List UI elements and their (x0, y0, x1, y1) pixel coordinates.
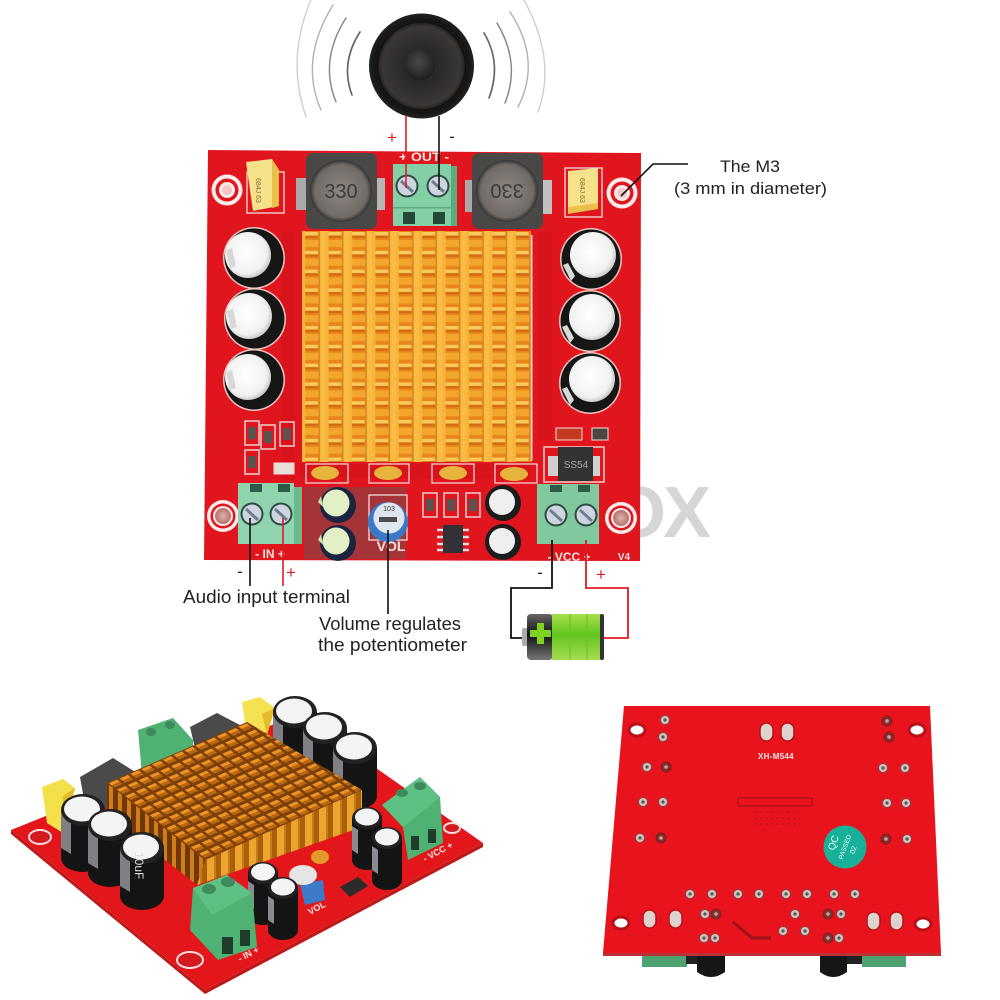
inductors (296, 153, 552, 229)
wire: volume leader (387, 530, 389, 614)
green terminal front (190, 875, 257, 960)
wires: audio input (250, 518, 283, 586)
small capacitors right (352, 807, 402, 890)
ceramic capacitors (306, 464, 537, 483)
power polarity marks: - (537, 563, 543, 582)
yellow capacitors (42, 697, 275, 833)
rear view of board (603, 706, 941, 977)
potentiometer (368, 495, 408, 542)
yellow film capacitors (246, 159, 602, 217)
ceramic capacitor (311, 850, 329, 864)
board silkscreen labels (255, 538, 631, 564)
label: volume potentiometer: Volume regulates (319, 614, 461, 634)
protruding parts (642, 950, 906, 977)
large solder pads (643, 723, 903, 930)
speaker polarity marks: + (387, 128, 397, 147)
SS54 diode: SS54 (564, 460, 589, 471)
small black capacitors (485, 485, 521, 560)
sound waves right (484, 0, 545, 112)
QC sticker (824, 826, 866, 868)
label: volume potentiometer: the potentiometer (318, 635, 467, 655)
small green capacitors (318, 487, 356, 561)
potentiometer: 103 (383, 506, 395, 513)
label: M3 hole size: (3 mm in diameter) (674, 179, 827, 198)
input polarity marks: - (237, 562, 243, 581)
green terminal right (382, 777, 443, 860)
rear capacitors (273, 696, 377, 810)
tinted overlap zone (304, 487, 406, 559)
QC sticker: PASSED (838, 834, 853, 861)
green terminal rear (138, 718, 193, 775)
heat sink (302, 231, 532, 462)
sound waves left (297, 0, 360, 117)
board (11, 714, 483, 990)
chip outline (738, 798, 812, 806)
board silkscreen labels: - IN + (255, 547, 285, 561)
chip via grid (755, 812, 800, 824)
silkscreen labels: VOL (306, 899, 328, 917)
input terminal (238, 483, 302, 544)
heat sink (107, 722, 362, 885)
label: OUT: + OUT - (399, 150, 449, 164)
board (204, 150, 641, 561)
silkscreen labels: - IN + (236, 944, 261, 964)
mounting holes (29, 823, 460, 968)
QC sticker: 02 (849, 845, 859, 855)
watermark: OX (610, 473, 711, 553)
input polarity marks: + (286, 563, 296, 582)
trace (733, 922, 771, 938)
front left capacitors (61, 794, 164, 910)
silkscreen labels (236, 840, 454, 964)
QC sticker: QC (826, 834, 842, 852)
mounting holes (207, 174, 638, 534)
icon: speaker with sound waves (297, 0, 545, 118)
label: M3 hole size: The M3 (720, 157, 780, 176)
output terminal (393, 164, 457, 226)
silkscreen labels: - VCC + (421, 840, 454, 864)
label: M3 hole size (674, 157, 827, 198)
right electrolytic capacitors (559, 228, 622, 414)
model label: XH-M544 (758, 752, 794, 761)
callout: M3 hole leader line (621, 164, 688, 196)
inductors: 330 (490, 179, 524, 201)
inductors: 330 (324, 181, 358, 203)
input polarity marks (237, 562, 296, 582)
label: volume potentiometer (318, 614, 467, 655)
wires: battery power (511, 540, 628, 638)
wires: speaker output (406, 115, 439, 190)
speaker polarity marks: - (449, 127, 455, 146)
speaker polarity marks (387, 127, 455, 147)
label: audio input terminal: Audio input terminal (183, 587, 350, 607)
potentiometer (289, 865, 325, 905)
power terminal (537, 484, 599, 544)
top view circuit board (204, 150, 641, 564)
SS54 diode (544, 447, 604, 482)
board silkscreen labels: V4 (618, 552, 631, 563)
small surface-mount parts (245, 421, 608, 517)
inductors (80, 713, 240, 810)
perspective view of board (11, 696, 483, 994)
small capacitors front (248, 862, 298, 940)
amplifier chip (437, 525, 469, 553)
solder joints (634, 714, 912, 944)
board silkscreen labels: - VCC + (547, 550, 591, 564)
left electrolytic capacitors (223, 227, 286, 411)
board (603, 706, 941, 953)
mounting holes (613, 724, 931, 930)
chip (340, 877, 368, 897)
power polarity marks (537, 563, 606, 584)
power polarity marks: + (596, 565, 606, 584)
icon: battery (522, 614, 604, 660)
front left capacitors: 10uF (132, 852, 146, 879)
yellow film capacitors: 684J 63 (254, 178, 261, 203)
yellow film capacitors: 684J 63 (578, 178, 585, 203)
board silkscreen labels: VOL (377, 538, 406, 554)
speaker cone (369, 14, 474, 118)
